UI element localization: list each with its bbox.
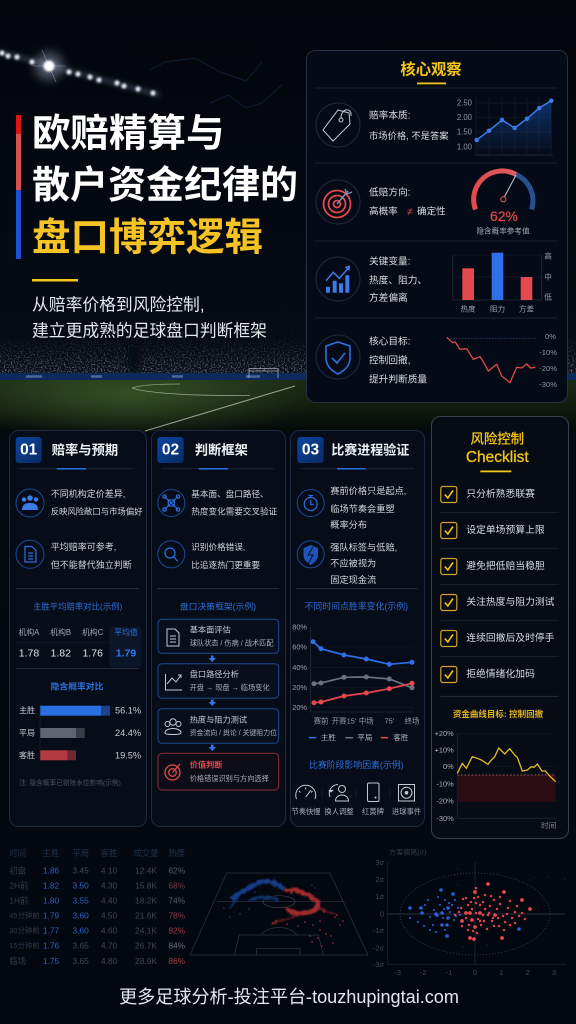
point: strong team label: 不应被视为	[330, 557, 376, 568]
bar chart: implied probability: 客胜	[19, 750, 35, 760]
bar chart: implied probability: 56.1%	[115, 706, 141, 716]
observation 4: core goal: 核心目标:	[369, 334, 410, 348]
icon row: stage factors: 节奏快慢	[291, 807, 321, 816]
heading 03: 比赛进程验证	[331, 442, 409, 458]
line chart: win rate over time: 中场	[359, 716, 374, 726]
observation 4: core goal: 控制回撤,	[369, 354, 410, 366]
bar chart: implied probability: 19.5%	[115, 750, 141, 760]
bar chart: key variables: 方差	[519, 304, 534, 314]
pitch heat map	[190, 873, 368, 955]
chart: capital curve target: -20%	[436, 796, 454, 806]
row: 2H before: 2H前	[9, 881, 28, 891]
bar chart: implied probability: 主胜	[19, 705, 35, 715]
table header: 客胜	[101, 848, 118, 858]
point: pre-match price	[297, 485, 406, 530]
line chart: win rate over time: 不同时间点胜率变化(示例)	[305, 601, 408, 612]
row: 45 min before: 4.50	[101, 911, 117, 921]
point: average odds: 但不能替代独立判断	[51, 559, 132, 570]
subtitle	[32, 296, 267, 340]
observation 4: core goal	[316, 334, 427, 386]
row: 1H before: 18.2K	[135, 896, 157, 906]
bar chart: key variables: 阻力	[490, 304, 505, 314]
bar chart: implied probability	[19, 681, 141, 762]
row: 30 min before	[9, 926, 186, 936]
row: opening: 1.86	[43, 866, 59, 876]
table: average home odds: 1.76	[82, 648, 103, 660]
title: 盘口博弈逻辑	[32, 216, 263, 260]
observation 4: core goal: 提升判断质量	[369, 372, 427, 386]
panel: 01 odds and expectation	[10, 430, 146, 826]
scatter plot: variance deviation: 1σ	[375, 892, 384, 901]
observation 2: low odds direction: 确定性	[417, 206, 446, 218]
flow step: handicap path: 开盘 → 现盘 → 临场变化	[190, 683, 270, 692]
title underline	[32, 279, 78, 282]
observation 1: odds nature: 赔率本质:	[369, 108, 410, 122]
scatter plot: variance deviation: -2	[420, 968, 427, 977]
chart: capital curve target: -30%	[436, 814, 454, 823]
scatter plot: variance deviation: 2	[526, 968, 530, 977]
check item 5: 连续回撤后及时停手	[466, 631, 555, 644]
title: 散户资金纪律的	[32, 165, 298, 207]
row: opening	[9, 866, 186, 876]
row: kickoff: 临场	[9, 956, 26, 966]
chart: capital curve target: 资金曲线目标: 控制回撤	[453, 709, 544, 719]
line chart: win rate over time: 开赛15'	[332, 716, 357, 726]
table: average home odds: 1.82	[50, 648, 71, 660]
title: 欧赔精算与	[32, 112, 225, 156]
panel: 02 judgment framework	[152, 430, 286, 826]
row: 2H before: 15.8K	[135, 881, 157, 891]
row: 30 min before: 1.77	[43, 926, 59, 936]
badge 02: 02	[162, 442, 179, 458]
point: pricing errors	[158, 541, 260, 570]
chart: capital curve target	[435, 709, 556, 830]
row: 2H before	[9, 881, 186, 891]
table: average home odds	[16, 602, 142, 667]
flow step: fundamentals	[158, 619, 279, 653]
scatter plot: variance deviation: -1	[446, 968, 452, 977]
row: kickoff: 1.75	[43, 956, 59, 966]
row: 15 min before	[9, 941, 186, 951]
heading 02: 判断框架	[195, 442, 248, 458]
observation 2: low odds direction: ≠	[407, 206, 413, 218]
note: 注: 隐含概率已剔除水位影响(示例)	[19, 778, 121, 787]
flow step: heat and resistance	[158, 709, 279, 743]
line chart: drawdown: 0%	[545, 332, 556, 341]
table header: 平局	[72, 848, 89, 858]
gauge: implied probability: 62%	[490, 208, 518, 224]
row: 1H before: 4.40	[101, 896, 117, 906]
table header: 时间	[9, 848, 26, 858]
row: 1H before: 74%	[168, 896, 186, 906]
point: pricing errors: 识别价格错误,	[191, 541, 245, 552]
row: 45 min before: 3.60	[73, 911, 89, 921]
arrow	[209, 656, 216, 662]
stadium floodlights	[0, 50, 160, 95]
row: kickoff: 4.80	[101, 956, 117, 966]
row: kickoff: 3.65	[73, 956, 89, 966]
point: pre-match price: 赛前价格只是起点,	[330, 485, 406, 496]
title accent bar	[16, 115, 21, 259]
scatter plot: variance deviation: -3σ	[373, 960, 384, 969]
line chart: odds trend: 2.00	[457, 113, 473, 122]
row: 15 min before: 26.7K	[135, 941, 157, 951]
scatter plot: variance deviation: -1σ	[373, 926, 384, 935]
check item 3	[441, 558, 545, 574]
point: strong team label: 固定现金流	[330, 574, 376, 585]
flow step: handicap path	[158, 664, 279, 698]
row: opening: 62%	[168, 866, 186, 876]
check item 1	[441, 486, 535, 502]
badge 01	[16, 437, 42, 463]
chart: capital curve target: 时间	[541, 820, 556, 830]
badge 03: 03	[302, 442, 319, 458]
icon row: stage factors: 红黄牌	[362, 807, 384, 816]
legend: 主胜	[321, 732, 336, 742]
observation 1: odds nature	[316, 103, 449, 147]
row: 15 min before: 3.65	[73, 941, 89, 951]
checklist heading: 风险控制	[471, 432, 524, 446]
row: 15 min before: 1.76	[43, 941, 59, 951]
line chart: win rate over time: 60%	[292, 642, 307, 652]
line chart: drawdown: -20%	[539, 364, 557, 373]
check item 6: 拒绝情绪化加码	[466, 667, 535, 680]
row: 45 min before	[9, 911, 186, 921]
observation 2: low odds direction: 高概率	[369, 206, 398, 218]
table header: 成交量	[133, 848, 159, 858]
check item 3: 避免把低赔当稳胆	[466, 559, 545, 572]
row: opening: 3.45	[73, 866, 89, 876]
icon row: stage factors	[291, 783, 421, 816]
row: 45 min before: 21.6K	[135, 911, 157, 921]
gauge: implied probability: 隐含概率参考值	[476, 226, 530, 236]
scatter plot: variance deviation: 3σ	[375, 858, 384, 867]
data table: odds movement	[9, 848, 186, 966]
check item 6	[441, 666, 535, 682]
row: 30 min before: 4.60	[101, 926, 117, 936]
line chart: win rate over time: 赛前	[314, 716, 328, 726]
table: average home odds: 1.78	[19, 648, 39, 660]
table header: 热度	[168, 848, 186, 858]
flow step: heat and resistance: 热度与阻力测试	[190, 714, 247, 724]
flow heading: 盘口决策框架(示例)	[180, 601, 256, 612]
panel: core observations	[306, 50, 568, 402]
line chart: win rate over time: 75'	[384, 716, 395, 726]
point: strong team label: 强队标签与低赔,	[330, 541, 397, 552]
arrow	[209, 744, 216, 751]
observation 3: key variables: 热度、阻力、	[369, 274, 427, 286]
line chart: win rate over time	[292, 601, 419, 742]
panel heading: 核心观察	[400, 60, 462, 78]
check item 5	[441, 630, 555, 646]
scatter plot: variance deviation: 3	[552, 968, 556, 977]
chart: capital curve target: 0%	[443, 762, 454, 771]
observation 2: low odds direction	[316, 180, 446, 224]
table: average home odds: 平均值	[114, 627, 138, 637]
flow step: fundamentals: 球队状态 / 伤病 / 战术匹配	[190, 638, 274, 648]
bar chart: implied probability: 隐含概率对比	[51, 681, 104, 692]
point: pre-match price: 概率分布	[330, 519, 367, 530]
row: opening: 12.4K	[135, 866, 157, 876]
checklist heading: Checklist	[466, 449, 529, 466]
bar chart: key variables: 热度	[460, 304, 476, 314]
observation 3: key variables: 关键变量:	[369, 254, 410, 268]
point: pricing differences: 不同机构定价差异,	[51, 488, 125, 499]
panel: 03 match progress	[290, 430, 424, 826]
subtitle: 建立更成熟的足球盘口判断框架	[32, 322, 267, 340]
row: opening: 初盘	[9, 866, 26, 876]
gauge: implied probability	[474, 171, 533, 236]
bar chart: key variables: 高	[544, 250, 552, 260]
footer: website line: 更多足球分析-投注平台-touzhupingtai.com	[119, 987, 459, 1007]
observation 2: low odds direction: 低赔方向:	[369, 186, 410, 198]
table header	[9, 848, 186, 858]
flow step: heat and resistance: 资金流向 / 舆论 / 关键阻力位	[190, 728, 277, 737]
scatter plot: variance deviation: -2σ	[373, 944, 384, 952]
arrow	[209, 700, 216, 706]
bar chart: key variables: 低	[544, 292, 552, 302]
scatter plot: variance deviation: 0	[380, 910, 384, 918]
row: 30 min before: 82%	[168, 926, 186, 936]
bar chart: key variables: 中	[544, 272, 552, 282]
check item 2	[441, 522, 545, 538]
checklist heading	[466, 432, 529, 472]
observation 3: key variables: 方差偏离	[369, 291, 408, 304]
table: average home odds: 机构B	[50, 627, 71, 637]
row: 45 min before: 45分钟前	[9, 911, 40, 920]
point: strong team label	[297, 541, 397, 585]
check item 1: 只分析熟悉联赛	[466, 487, 535, 500]
scatter plot: variance deviation	[373, 848, 566, 977]
flow step: handicap path: 盘口路径分析	[190, 669, 239, 679]
title	[32, 112, 298, 260]
row: 1H before: 1H前	[9, 896, 28, 906]
scatter plot: variance deviation: 0	[473, 968, 477, 977]
point: average odds: 平均赔率可参考,	[51, 541, 116, 552]
legend: 客胜	[393, 732, 409, 742]
scatter plot: variance deviation: 1	[499, 968, 503, 977]
flow step: value judgment	[158, 753, 279, 790]
check item 4: 关注热度与阻力测试	[466, 595, 555, 608]
badge 01: 01	[20, 442, 38, 458]
bar chart: implied probability: 24.4%	[115, 728, 141, 738]
scatter plot: variance deviation: 2σ	[375, 875, 384, 884]
legend: 平局	[357, 733, 372, 742]
flow step: value judgment: 价格错误识别与方向选择	[190, 774, 269, 783]
row: kickoff: 86%	[168, 956, 186, 966]
row: 15 min before: 4.70	[101, 941, 117, 951]
line chart: odds trend: 1.50	[457, 128, 473, 136]
point: average odds	[16, 540, 132, 570]
row: kickoff	[9, 956, 186, 966]
point: pricing differences	[16, 488, 142, 517]
row: 1H before: 3.55	[73, 896, 89, 906]
row: 45 min before: 78%	[168, 911, 186, 921]
heading: stage factors: 比赛阶段影响因素(示例)	[309, 759, 404, 770]
bar chart: key variables	[453, 250, 552, 314]
line chart: win rate over time: 20%	[292, 703, 307, 712]
heading 01: 赔率与预期	[52, 442, 118, 458]
point: cross validation	[158, 488, 278, 517]
stadium hero background	[0, 58, 576, 432]
row: 30 min before: 24.1K	[135, 926, 157, 936]
observation 1: odds nature: 市场价格, 不是答案	[369, 130, 449, 141]
point: pricing differences: 反映风险敞口与市场偏好	[51, 507, 142, 517]
icon row: stage factors: 换人调整	[324, 807, 354, 816]
chart: capital curve target: +20%	[435, 729, 454, 738]
row: 2H before: 3.50	[73, 881, 89, 891]
panel: risk control checklist	[432, 416, 568, 838]
flow step: fundamentals: 基本面评估	[190, 624, 231, 634]
scatter plot: variance deviation: 方差偏离(σ)	[389, 848, 426, 856]
row: 2H before: 4.30	[101, 881, 117, 891]
bar chart: implied probability: 平局	[19, 728, 35, 738]
line chart: win rate over time: 终场	[405, 716, 419, 726]
line chart: win rate over time: 20%	[292, 683, 307, 692]
icon row: stage factors: 进球事件	[392, 807, 421, 816]
table: average home odds: 机构A	[19, 627, 40, 637]
line chart: drawdown	[447, 332, 557, 389]
row: 1H before	[9, 896, 186, 906]
point: cross validation: 基本面、盘口路径、	[191, 488, 269, 499]
row: kickoff: 28.9K	[135, 956, 157, 966]
subtitle: 从赔率价格到风险控制,	[32, 296, 204, 314]
scatter plot: variance deviation: -3	[394, 968, 401, 977]
line chart: drawdown: -30%	[539, 380, 557, 389]
observation 3: key variables	[316, 254, 427, 304]
row: 2H before: 1.82	[43, 881, 59, 891]
flow step: value judgment: 价值判断	[190, 760, 222, 770]
row: 15 min before: 84%	[168, 941, 186, 951]
table header: 主胜	[43, 848, 60, 858]
check item 2: 设定单场预算上限	[466, 523, 545, 536]
line chart: odds trend	[457, 98, 553, 155]
line chart: win rate over time: 40%	[292, 663, 307, 672]
row: opening: 4.10	[101, 866, 117, 876]
row: 15 min before: 15分钟前	[9, 941, 40, 950]
chart: capital curve target: +10%	[435, 746, 454, 754]
point: cross validation: 热度变化需要交叉验证	[191, 506, 278, 517]
row: 30 min before: 30分钟前	[9, 926, 40, 935]
row: 1H before: 1.80	[43, 896, 59, 906]
row: 2H before: 68%	[168, 881, 186, 891]
check item 4	[441, 594, 555, 610]
line chart: odds trend: 2.50	[457, 98, 473, 108]
badge 03	[297, 437, 324, 463]
line chart: drawdown: -10%	[539, 348, 557, 357]
table: average home odds: 机构C	[82, 627, 104, 637]
table: average home odds: 1.79	[116, 648, 136, 660]
line chart: win rate over time: 80%	[292, 622, 307, 632]
legend	[309, 732, 409, 742]
line chart: odds trend: 1.00	[457, 142, 473, 152]
row: 45 min before: 1.79	[43, 911, 59, 921]
badge 02	[157, 437, 184, 463]
table: average home odds: 主胜平均赔率对比(示例)	[33, 602, 123, 612]
point: pricing errors: 比追逐热门更重要	[191, 559, 260, 570]
chart: capital curve target: -10%	[436, 780, 454, 788]
row: 30 min before: 3.60	[73, 926, 89, 936]
point: pre-match price: 临场节奏会重塑	[330, 503, 395, 514]
